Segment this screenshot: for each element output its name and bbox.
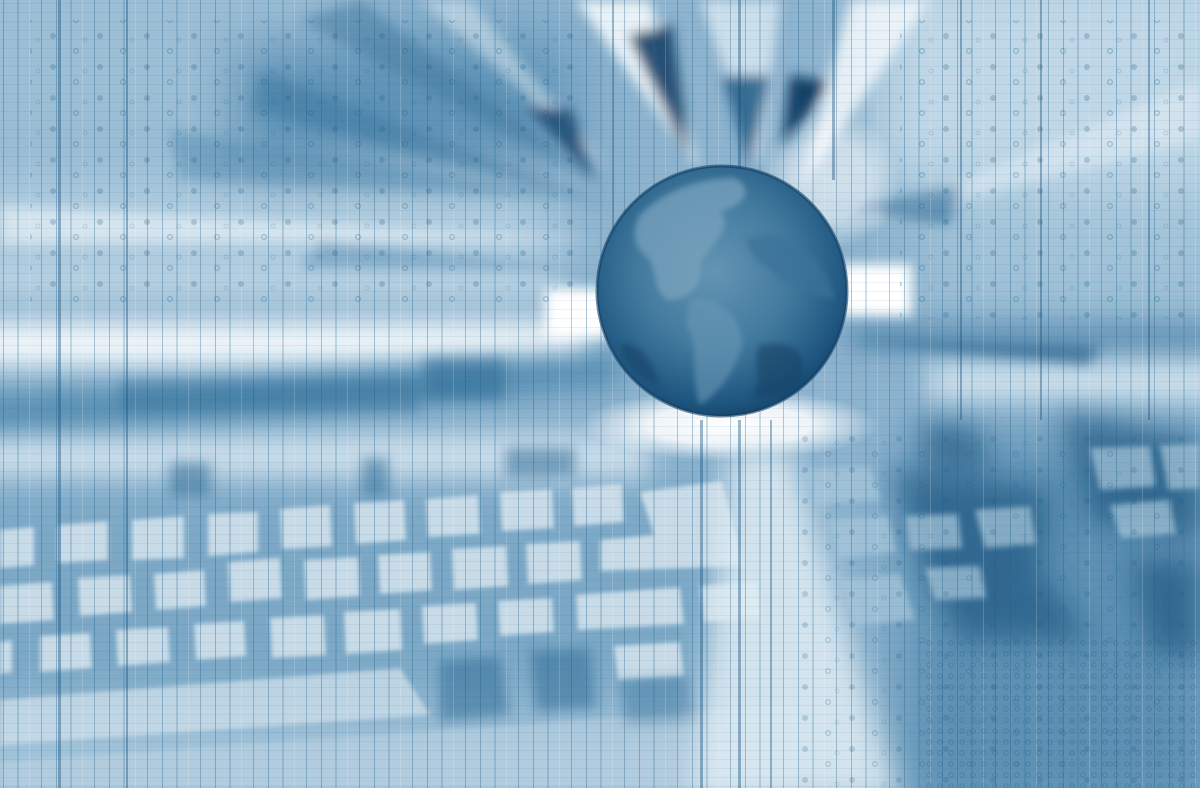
keyboard: dark gaps between keys: [120, 358, 700, 724]
centre-bottom light streak: [690, 450, 900, 788]
white horizontal light bands: [0, 270, 1200, 476]
rays radiating from the globe: [0, 0, 1200, 365]
central white glow behind globe: [545, 110, 912, 461]
keyboard: right perspective keys: [805, 410, 1200, 660]
globe rim: [597, 166, 847, 416]
keyboard: light keys: [0, 481, 800, 788]
continents: [620, 178, 835, 405]
globe sphere: [597, 166, 847, 416]
dark keyboard top band: [0, 326, 1200, 428]
icon: globe: [597, 166, 847, 416]
